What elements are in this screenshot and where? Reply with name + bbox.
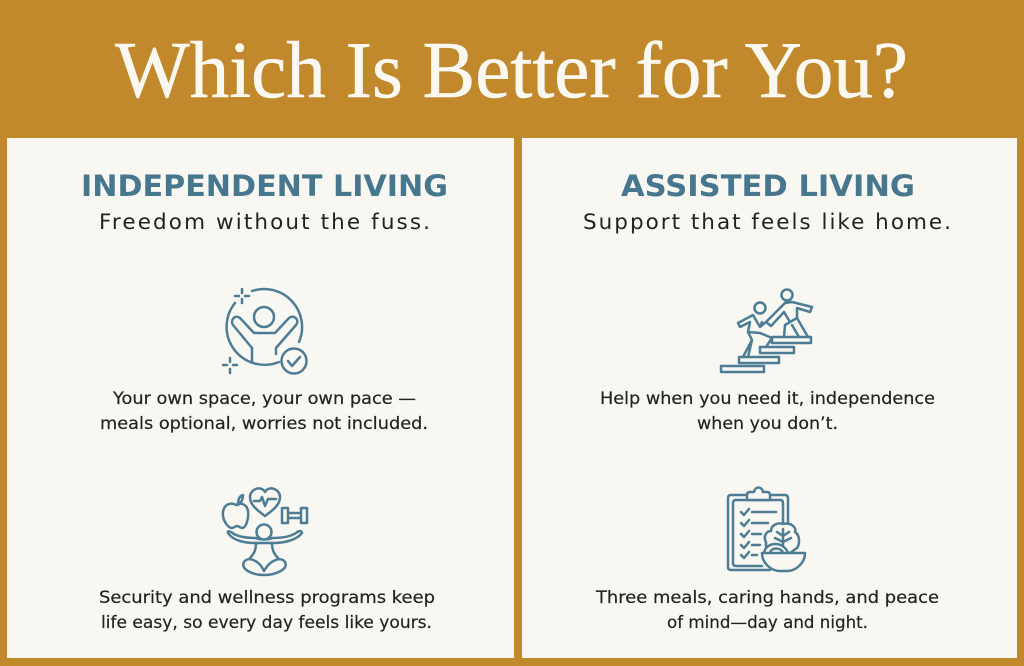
subheading: freedom: Freedom without the fuss.	[99, 210, 430, 235]
title: Which Is Better for You?	[115, 27, 908, 115]
icon: checklist and salad bowl	[728, 488, 805, 571]
icon: wellness meditation	[223, 488, 307, 575]
text: your own space: meals optional, worries not included.	[100, 414, 428, 434]
heading: assisted living: ASSISTED LIVING	[621, 169, 915, 203]
text: three meals: of mind—day and night.	[667, 613, 868, 633]
text: help when you need it: when you don’t.	[697, 414, 838, 434]
icon: person with raised arms	[223, 289, 306, 374]
heading: independent living: INDEPENDENT LIVING	[81, 169, 448, 203]
text: help when you need it	[600, 389, 935, 434]
text: three meals	[595, 588, 939, 633]
icon: helping up stairs	[721, 290, 812, 372]
text: security and wellness: life easy, so every day feels like yours.	[101, 613, 432, 633]
subheading: support: Support that feels like home.	[583, 210, 951, 235]
text: help when you need it: Help when you need it, independence	[600, 389, 935, 409]
panel: assisted living	[522, 138, 1017, 658]
text: your own space: Your own space, your own pace —	[112, 389, 416, 409]
panel: independent living	[7, 138, 514, 658]
text: your own space	[100, 389, 428, 434]
text: security and wellness: Security and wellness programs keep	[99, 588, 435, 608]
text: three meals: Three meals, caring hands, and peace	[595, 588, 939, 608]
text: security and wellness	[99, 588, 435, 633]
